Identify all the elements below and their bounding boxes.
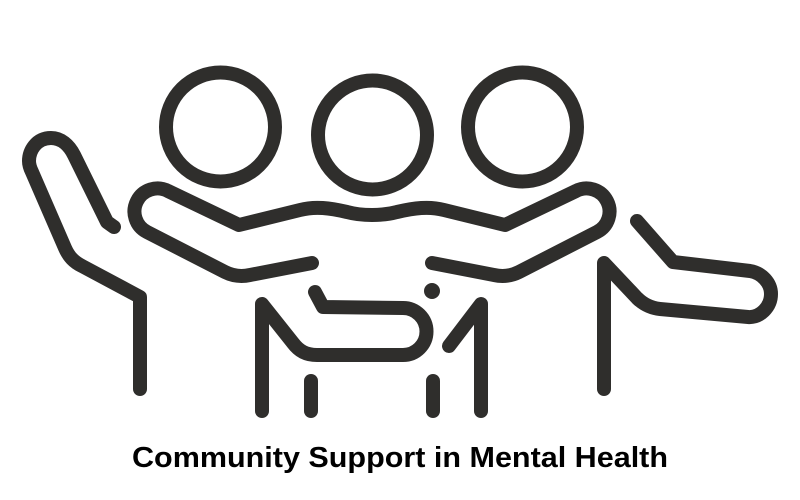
figure: far left person with raised arm xyxy=(29,138,140,389)
title: Community Support in Mental Health xyxy=(132,442,668,474)
figure: short inner right leg xyxy=(426,381,440,411)
icon: small dot xyxy=(424,283,440,299)
head: middle person xyxy=(318,80,427,190)
head: left person xyxy=(166,72,275,182)
icon: community group xyxy=(29,72,771,411)
figure: centre embracing arms xyxy=(134,188,610,276)
figure: lower left person with supporting arm xyxy=(262,292,426,411)
figure: far right person with extended arm xyxy=(604,221,771,389)
figure: lower right person xyxy=(449,304,481,411)
figure: short inner left leg xyxy=(304,381,318,411)
head: right person xyxy=(468,72,577,182)
